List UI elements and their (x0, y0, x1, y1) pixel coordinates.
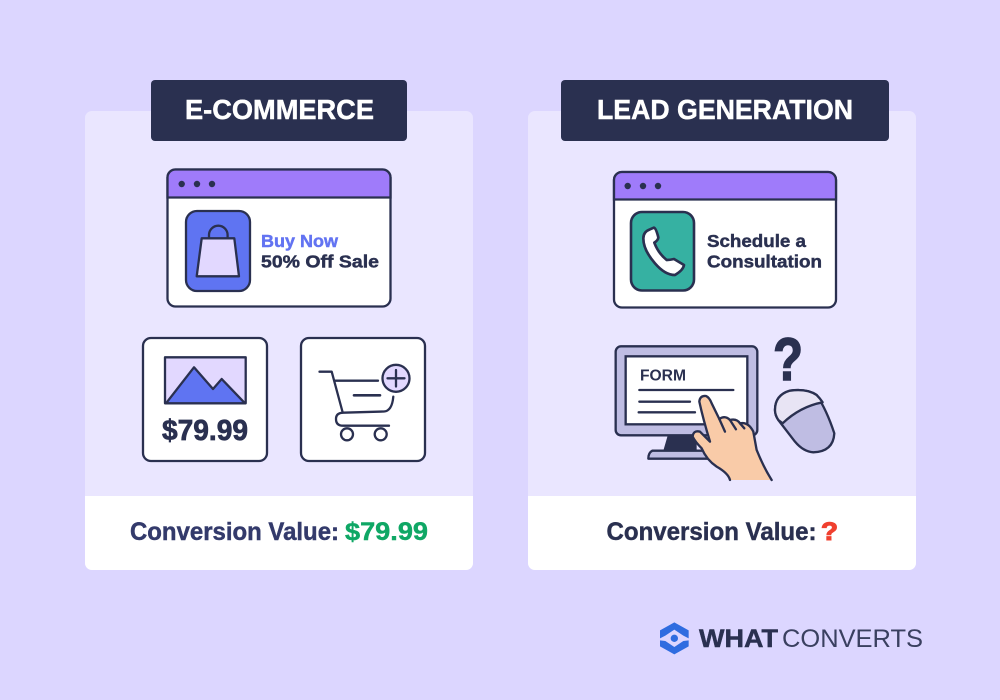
form label: FORM (640, 368, 686, 385)
logo: whatconverts (660, 622, 923, 654)
icon: phone (631, 212, 694, 290)
panel background (528, 111, 916, 570)
icon: shopping bag (186, 211, 250, 291)
heading: lead generation (561, 80, 889, 141)
monitor body (616, 346, 757, 435)
footer: conversion value (85, 496, 473, 570)
text: buy now offer: Buy Now (261, 231, 338, 251)
icon: pointing hand (693, 396, 772, 480)
heading: e-commerce (151, 80, 407, 141)
monitor base (648, 451, 713, 459)
text: schedule a consultation: Consultation (707, 252, 822, 272)
text: buy now offer: 50% Off Sale (261, 252, 379, 272)
monitor screen (626, 356, 747, 424)
panel: lead generation (528, 80, 916, 570)
text: schedule a consultation: Schedule a (707, 231, 806, 251)
logo mark (660, 622, 689, 654)
footer: conversion value: $79.99 (345, 518, 428, 546)
illustration: monitor with form (616, 346, 772, 480)
footer: conversion value unknown (528, 496, 916, 570)
logo wordmark: CONVERTS (782, 625, 923, 653)
heading: e-commerce: E-COMMERCE (185, 94, 374, 125)
text: buy now offer (261, 231, 379, 272)
footer: conversion value: Conversion Value: (130, 518, 339, 546)
icon: question mark: ? (773, 326, 803, 393)
product card: price (143, 338, 267, 461)
product card: add to cart (301, 338, 425, 461)
panel background (85, 111, 473, 570)
icon: cart (320, 365, 410, 440)
monitor stand (663, 433, 697, 451)
product card: price: $79.99 (162, 415, 248, 447)
browser window: schedule consultation (614, 172, 836, 308)
icon: computer mouse (775, 390, 834, 452)
browser window: buy now (168, 170, 390, 306)
footer: conversion value unknown: Conversion Value: (606, 518, 816, 546)
text: schedule a consultation (707, 231, 822, 272)
heading: lead generation: LEAD GENERATION (597, 94, 853, 125)
logo wordmark (699, 625, 923, 653)
footer: conversion value unknown: ? (821, 518, 838, 546)
panel: e-commerce (85, 80, 473, 570)
form lines (639, 390, 733, 412)
icon: product image (165, 357, 246, 403)
logo wordmark: WHAT (699, 625, 778, 653)
